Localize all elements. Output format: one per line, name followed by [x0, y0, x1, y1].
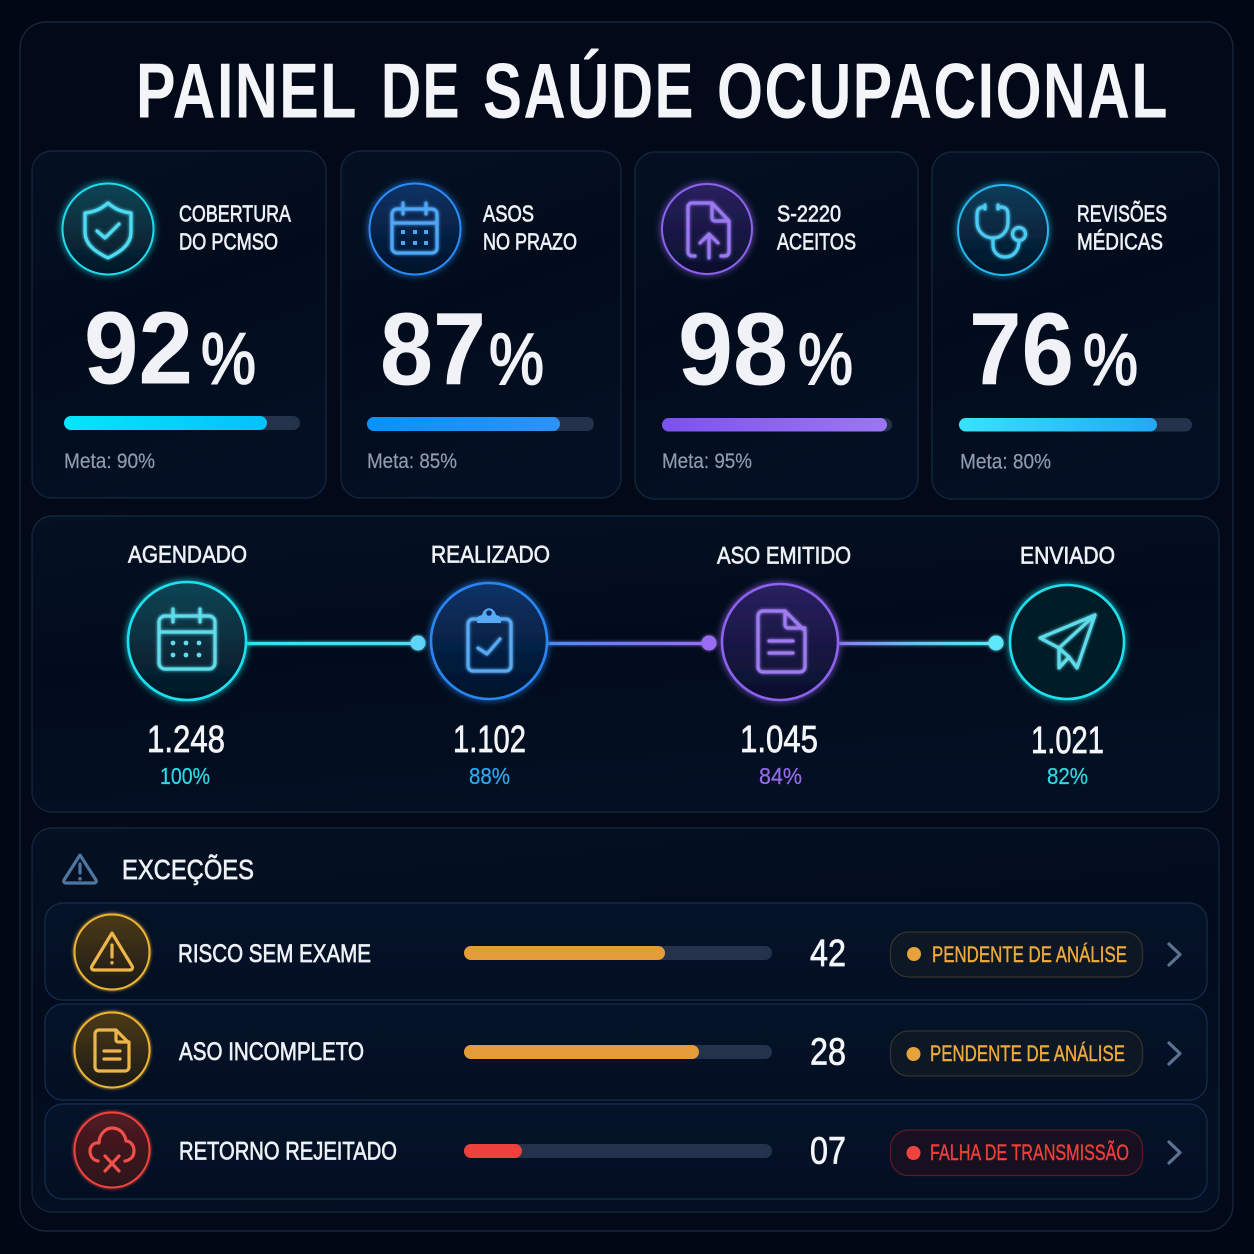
icon: warning: [74, 914, 150, 990]
label: ACEITOS: [777, 228, 856, 254]
status pill: PENDENTE DE ANÁLISE: [932, 942, 1127, 967]
step: ASO emitido: [717, 542, 851, 789]
panel: revisões médicas: [932, 152, 1219, 499]
value 92%: 92: [84, 290, 193, 406]
row: risco sem exame: [45, 903, 1207, 1000]
icon: header warning: [64, 855, 96, 883]
icon: file upload: [662, 184, 752, 274]
count: 07: [810, 1130, 846, 1172]
label: [179, 200, 292, 254]
meta: Meta: 85%: [367, 450, 457, 473]
panel: ASOs no prazo: [341, 151, 621, 498]
step: enviado: [1010, 542, 1124, 789]
progress bar: [662, 418, 892, 432]
value 76%: [969, 292, 1138, 406]
icon: document: [74, 1012, 150, 1088]
label: [1077, 200, 1167, 254]
panel: cobertura do PCMSO: [32, 151, 326, 498]
panel: exceções: [32, 828, 1219, 1212]
panel: fluxo: [32, 516, 1219, 812]
icon: shield: [62, 184, 154, 274]
progress bar: [959, 418, 1192, 432]
value 92%: [84, 290, 256, 406]
panel: S-2220 aceitos: [635, 152, 918, 499]
icon: cloud error: [74, 1112, 150, 1188]
meta: Meta: 80%: [960, 450, 1051, 474]
step: agendado: AGENDADO: [128, 542, 247, 568]
step: realizado: 88%: [469, 763, 510, 789]
value 98%: 98: [678, 292, 788, 406]
step: enviado: 82%: [1047, 763, 1088, 789]
icon: stethoscope: [958, 185, 1048, 275]
label: ASOS: [483, 200, 534, 226]
meta: Meta: 95%: [662, 450, 752, 473]
label: S-2220: [777, 200, 841, 226]
row: ASO incompleto: [45, 1004, 1207, 1100]
value 76%: %: [1083, 320, 1138, 400]
bar: [464, 1045, 772, 1059]
chevron: [1169, 944, 1180, 965]
step: agendado: 1.248: [147, 719, 225, 761]
heading: EXCEÇÕES: [122, 854, 254, 885]
chevron: [1169, 1142, 1180, 1163]
step: ASO emitido: 84%: [759, 763, 802, 789]
status pill: [890, 932, 1142, 977]
value 98%: %: [798, 320, 853, 400]
label: RETORNO REJEITADO: [179, 1138, 397, 1166]
step: ASO emitido: 1.045: [740, 719, 818, 761]
status pill: [890, 1130, 1142, 1176]
connector 3: [838, 636, 1004, 650]
status pill: [890, 1031, 1142, 1076]
label: ASO INCOMPLETO: [179, 1038, 364, 1066]
title: DE: [381, 46, 461, 134]
bar: [464, 1144, 772, 1158]
connector 2: [548, 636, 716, 650]
label: RISCO SEM EXAME: [178, 940, 371, 968]
value 87%: %: [489, 320, 544, 400]
title: SAÚDE: [483, 46, 695, 134]
chevron: [1169, 1043, 1180, 1064]
icon: calendar: [370, 184, 460, 274]
progress bar: [367, 417, 594, 431]
step: realizado: [431, 542, 550, 789]
value 92%: %: [201, 320, 256, 400]
step: agendado: 100%: [160, 763, 210, 789]
value 76%: 76: [969, 292, 1074, 406]
status pill: FALHA DE TRANSMISSÃO: [930, 1140, 1129, 1165]
label: MÉDICAS: [1077, 228, 1163, 254]
label: NO PRAZO: [483, 228, 577, 254]
step: ASO emitido: ASO EMITIDO: [717, 542, 851, 570]
title: [136, 46, 1169, 134]
count: 28: [810, 1032, 846, 1074]
step: realizado: 1.102: [453, 719, 526, 761]
label: COBERTURA: [179, 200, 292, 226]
meta: Meta: 90%: [64, 450, 155, 473]
label: DO PCMSO: [179, 228, 278, 254]
progress bar: [64, 416, 300, 430]
bar: [464, 946, 772, 960]
step: realizado: REALIZADO: [431, 542, 550, 568]
count: 42: [810, 933, 846, 975]
connector 1: [246, 636, 426, 650]
value 87%: [380, 292, 544, 406]
label: [483, 200, 577, 254]
status pill: PENDENTE DE ANÁLISE: [930, 1041, 1125, 1066]
value 98%: [678, 292, 853, 406]
title: PAINEL: [136, 46, 358, 134]
label: REVISÕES: [1077, 200, 1167, 226]
step: enviado: 1.021: [1031, 720, 1104, 762]
step: enviado: ENVIADO: [1020, 542, 1115, 570]
row: retorno rejeitado: [45, 1104, 1207, 1199]
label: [777, 200, 856, 254]
step: agendado: [128, 542, 247, 789]
value 87%: 87: [380, 292, 486, 406]
